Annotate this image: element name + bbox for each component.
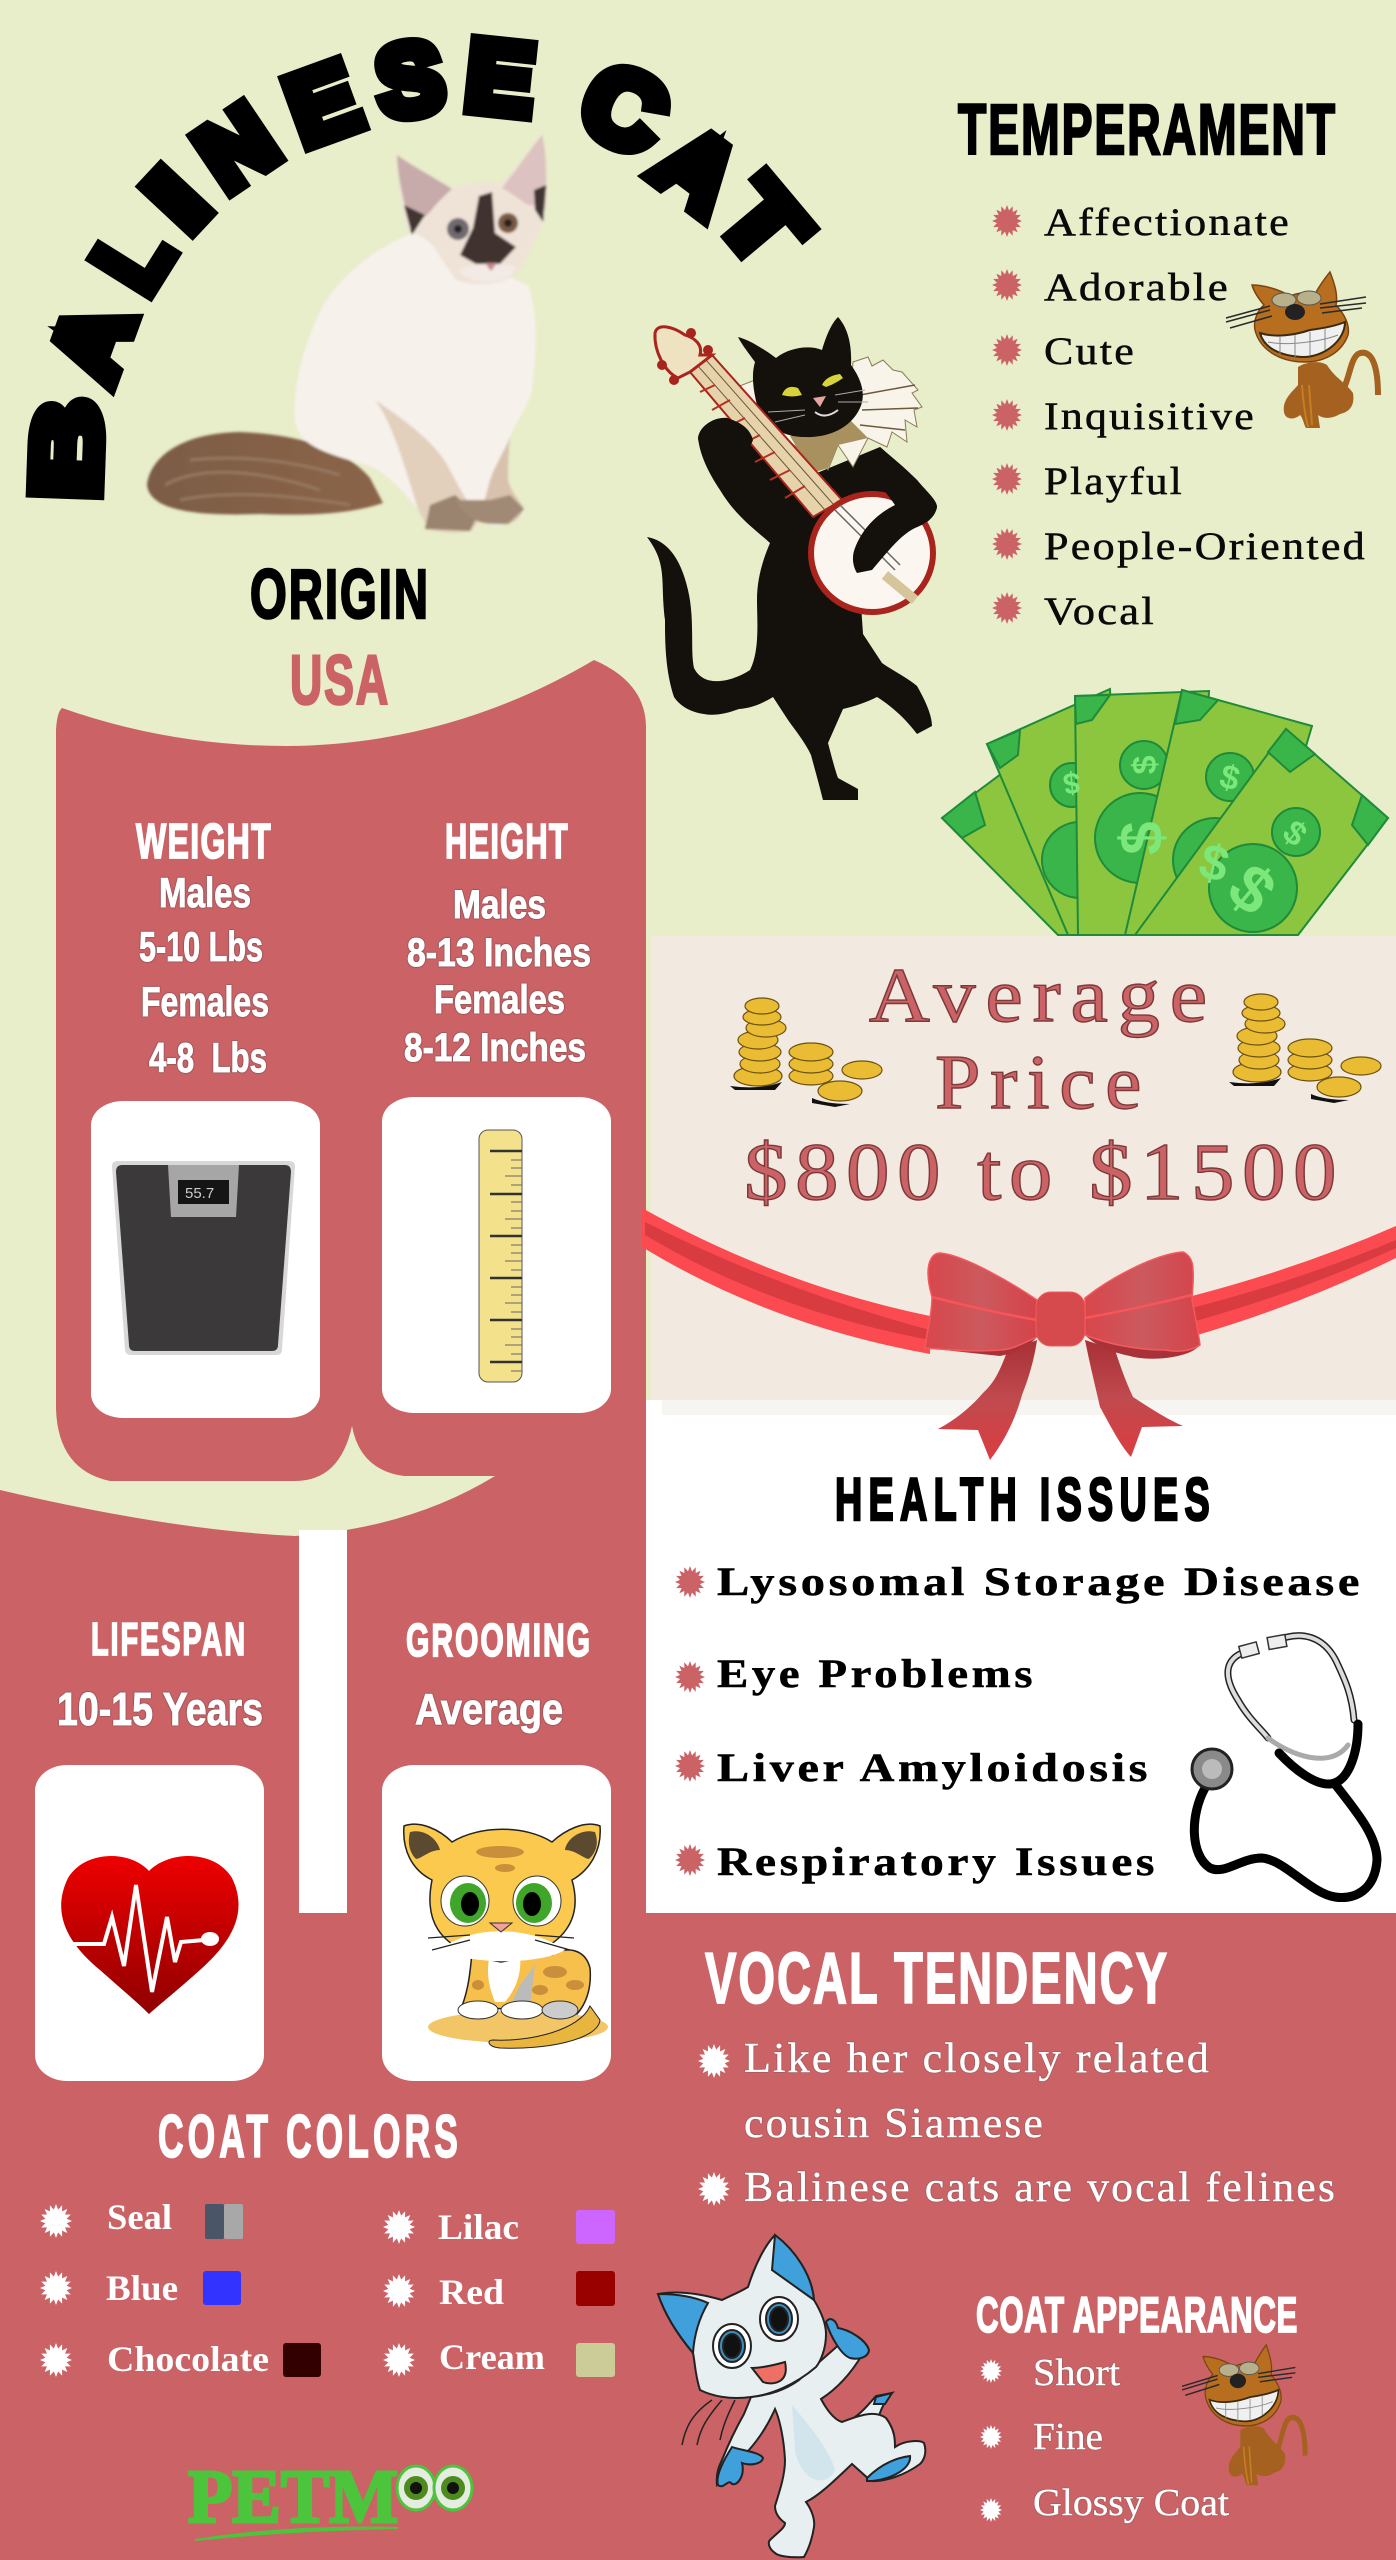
icon: black cat playing banjo <box>647 317 937 800</box>
title arc: A <box>634 104 760 237</box>
card: weight scale: 55.7 <box>185 1185 214 1202</box>
heading: average price: Average <box>869 952 1217 1038</box>
list: temperament: Vocal <box>1044 590 1156 633</box>
icon: fan of banknotes: $ <box>1194 832 1235 894</box>
list: health issues: Respiratory Issues <box>717 1839 1158 1884</box>
color list right <box>383 2207 615 2377</box>
list: temperament: Affectionate <box>1044 201 1291 244</box>
icon: grinning cat <box>1226 272 1378 428</box>
heading: height: HEIGHT <box>445 815 569 869</box>
icon: fan of banknotes: $ <box>1108 821 1175 855</box>
icon: coin pile right <box>1229 994 1381 1103</box>
height values: 8-13 Inches <box>407 931 591 975</box>
list: temperament: People-Oriented <box>1044 525 1367 568</box>
white divider bar <box>299 1530 347 1913</box>
title arc: S <box>370 19 450 139</box>
list: health issues: Eye Problems <box>717 1651 1036 1696</box>
bullet text: Like her closely related <box>744 2036 1211 2082</box>
title arc: E <box>273 40 373 168</box>
panel: grooming <box>382 1614 611 2081</box>
heading: lifespan: LIFESPAN <box>91 1613 247 1665</box>
icon: fan of banknotes <box>942 689 1388 935</box>
color list right: Cream <box>439 2337 545 2377</box>
height values: Males <box>453 883 546 927</box>
value: USA: USA <box>290 641 390 719</box>
bullet text: cousin Siamese <box>744 2101 1045 2147</box>
title arc: E <box>461 19 539 137</box>
heading: weight: WEIGHT <box>136 815 272 869</box>
weight values: Males <box>159 869 251 916</box>
card: heart <box>35 1765 264 2081</box>
color list left: Chocolate <box>107 2339 269 2379</box>
icon: small grinning cat <box>1182 2345 1305 2485</box>
heading: coat colors: COAT COLORS <box>158 2103 462 2170</box>
icon: fan of banknotes: $ <box>1216 757 1244 799</box>
panel: lower pink background <box>0 1476 1396 2560</box>
height values <box>404 883 591 1070</box>
panel: white health area <box>646 1400 1396 1913</box>
icon: fan of banknotes: $ <box>1275 813 1314 854</box>
color list left <box>40 2197 321 2379</box>
title arc <box>11 19 828 500</box>
card: weight scale <box>91 1101 320 1418</box>
panel: weight and height <box>56 660 646 1481</box>
height values: Females <box>434 978 565 1022</box>
bullet text: Glossy Coat <box>1033 2482 1229 2524</box>
title arc: I <box>125 149 229 250</box>
bullet text: Short <box>1033 2352 1120 2394</box>
panel: vocal tendency <box>698 1939 1337 2211</box>
icon: fan of banknotes: $ <box>1126 755 1164 775</box>
weight values: Females <box>141 978 269 1025</box>
weight values: 4-8 Lbs <box>149 1034 267 1081</box>
weight values: 5-10 Lbs <box>139 923 263 970</box>
value: years: 10-15 Years <box>57 1683 263 1735</box>
panel: coat appearance <box>976 2287 1298 2524</box>
heading: origin: ORIGIN <box>250 555 430 633</box>
title arc: T <box>696 160 828 287</box>
list: temperament: Playful <box>1044 460 1184 503</box>
color list left: Blue <box>106 2268 178 2308</box>
card: ruler <box>382 1097 611 1413</box>
bullet text: Balinese cats are vocal felines <box>744 2165 1337 2211</box>
bullet text <box>980 2352 1229 2524</box>
icon: fan of banknotes: $ <box>1215 849 1290 929</box>
icon: coin pile left <box>730 998 882 1107</box>
title arc: N <box>177 83 296 212</box>
bullet text: Fine <box>1033 2416 1103 2458</box>
title arc: C <box>564 39 684 178</box>
weight values <box>139 869 269 1081</box>
list: health issues: Liver Amyloidosis <box>717 1745 1151 1790</box>
color list right: Lilac <box>438 2207 519 2247</box>
title arc: A <box>28 289 154 395</box>
panel: coat colors <box>40 2103 615 2379</box>
color list right: Red <box>439 2272 504 2312</box>
list: temperament: Cute <box>1044 330 1136 373</box>
list: health issues <box>675 1559 1363 1884</box>
list: temperament: Inquisitive <box>1044 395 1256 438</box>
list: health issues: Lysosomal Storage Disease <box>717 1559 1363 1604</box>
logo: petmoo: PETM <box>188 2455 398 2539</box>
photo: Balinese cat <box>147 135 546 533</box>
heading: vocal tendency: VOCAL TENDENCY <box>705 1939 1169 2019</box>
card: leopard kitten <box>382 1765 611 2081</box>
icon: fan of banknotes: $ <box>1062 765 1082 800</box>
color list left: Seal <box>107 2197 172 2237</box>
pink shape <box>56 660 646 1481</box>
value: average: Average <box>415 1685 563 1734</box>
bullet text <box>698 2036 1337 2211</box>
title arc: L <box>73 206 193 310</box>
icon: happy white cartoon cat <box>658 2235 925 2557</box>
panel: lifespan <box>35 1613 264 2081</box>
panel: average price: Price <box>935 1039 1151 1125</box>
list: temperament <box>992 201 1367 633</box>
list: temperament: Adorable <box>1044 266 1230 309</box>
heading: grooming: GROOMING <box>406 1614 592 1666</box>
height values: 8-12 Inches <box>404 1026 586 1070</box>
price range: $800 to $1500 <box>744 1126 1344 1217</box>
panel: average price <box>651 936 1396 1415</box>
title arc: B <box>11 398 121 500</box>
icon: stethoscope <box>1192 1635 1377 1898</box>
icon: red ribbon and bow <box>642 1208 1396 1460</box>
